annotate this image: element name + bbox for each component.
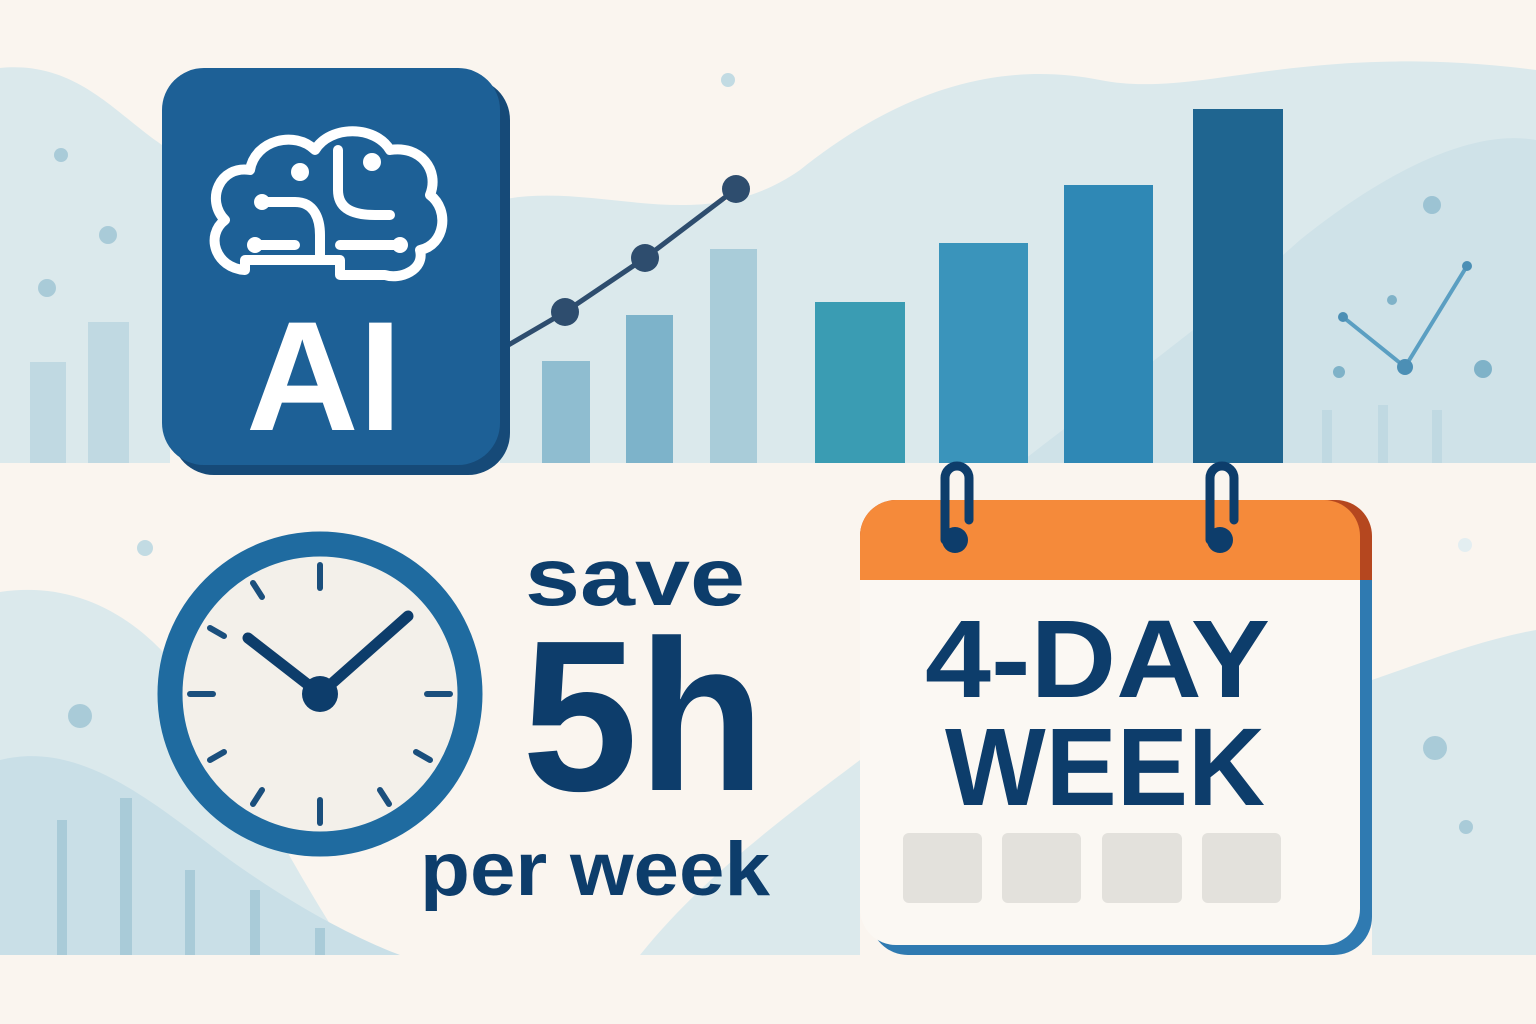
day boxes xyxy=(903,833,1281,903)
calendar rings xyxy=(945,466,1234,540)
text: save 5h per week: 5h xyxy=(522,595,765,836)
small line chart right xyxy=(1338,261,1472,375)
calendar xyxy=(860,466,1372,955)
background: bottom band waves xyxy=(0,538,1536,955)
calendar: WEEK xyxy=(945,706,1265,829)
text: save 5h per week xyxy=(420,532,771,912)
clock xyxy=(170,544,470,844)
text: save 5h per week: per week xyxy=(420,827,771,912)
icon: brain circuit xyxy=(215,131,442,276)
text: save 5h per week: save xyxy=(525,532,745,623)
text: 4-DAY WEEK: 4-DAY xyxy=(925,598,1270,721)
AI icon box xyxy=(162,68,510,475)
text: AI: AI xyxy=(246,290,402,464)
background: top band waves xyxy=(0,61,1536,463)
trend line xyxy=(505,175,750,347)
bar chart xyxy=(542,109,1283,463)
